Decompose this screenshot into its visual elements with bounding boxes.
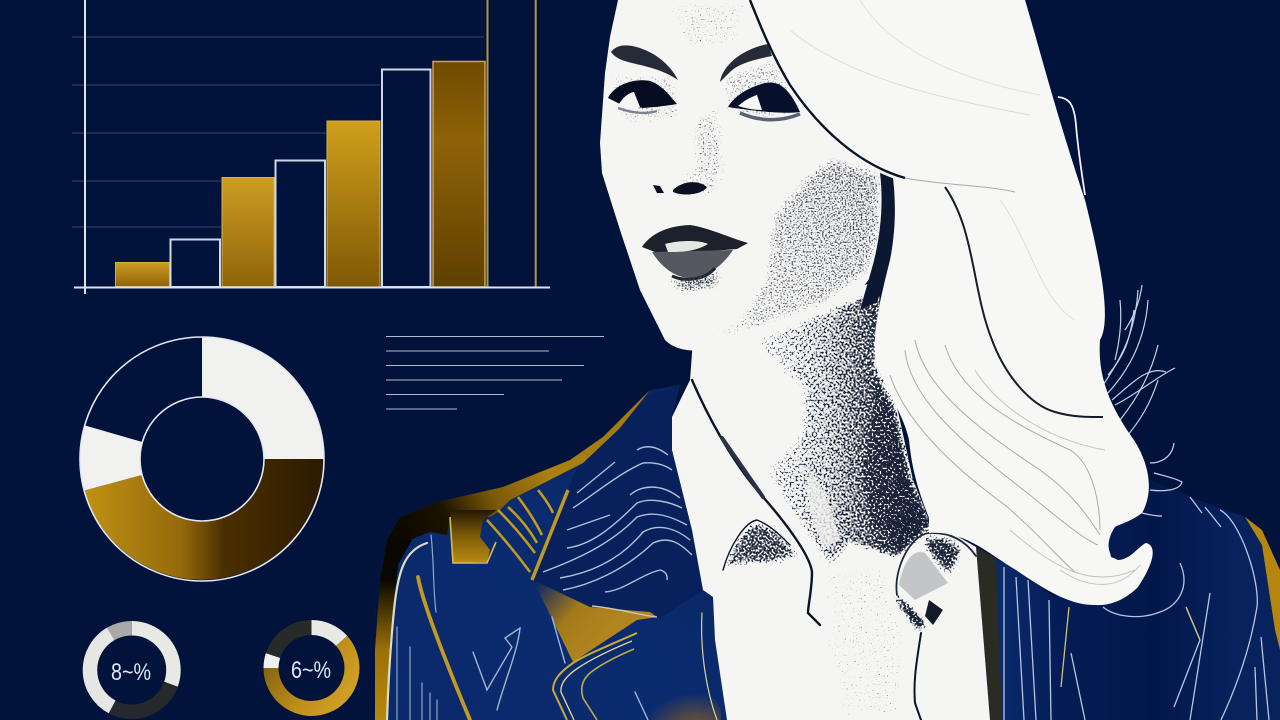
shadow beside face xyxy=(860,173,897,310)
sleeve gold edge xyxy=(375,540,412,720)
forehead stipple xyxy=(660,0,750,55)
neck highlight xyxy=(808,477,840,548)
donut segment: small white xyxy=(80,425,142,490)
gauge ring xyxy=(312,628,342,641)
lips xyxy=(642,225,748,279)
right eye surround stipple xyxy=(720,55,805,124)
text block: placeholder lines xyxy=(386,336,604,409)
bar 1 gold xyxy=(116,262,170,286)
jacket dark edge xyxy=(976,547,1002,720)
collar grey patch xyxy=(899,552,948,600)
gold lapel stripes xyxy=(450,490,568,580)
jacket lines xyxy=(1004,497,1269,720)
chart axes xyxy=(74,0,550,294)
neck shadow core xyxy=(858,285,931,548)
gauge: left xyxy=(90,628,173,712)
left eye surround stipple xyxy=(606,72,684,126)
jacket: left side xyxy=(375,385,727,720)
collar ink lines xyxy=(692,380,976,720)
face xyxy=(600,0,897,351)
lapel panel xyxy=(533,385,703,618)
bar chart xyxy=(72,0,550,294)
nose xyxy=(653,182,707,194)
shirt and neck xyxy=(672,280,990,720)
jacket: right side xyxy=(976,480,1280,720)
bar 6 outline xyxy=(382,70,430,287)
gauge label: 8~% xyxy=(111,659,151,686)
gauge white tab xyxy=(271,656,273,668)
bar 4 outline xyxy=(276,160,325,287)
neck stipple shading xyxy=(750,285,935,570)
hair front lock edge xyxy=(750,0,905,178)
hair xyxy=(750,0,1153,605)
gauge dark arc xyxy=(273,628,312,656)
bar 2 outline xyxy=(170,240,220,287)
collar button xyxy=(925,600,943,625)
donut segment: gold xyxy=(84,459,324,580)
copper accent xyxy=(649,687,721,720)
donut chart xyxy=(80,337,324,581)
bar 3 gold xyxy=(222,178,274,286)
shoulder gold band xyxy=(383,390,650,590)
sleeve lines xyxy=(387,535,717,720)
gauge gold arc xyxy=(271,641,352,708)
left eye xyxy=(608,80,677,113)
chest stipple xyxy=(820,560,910,720)
hair curl shadow xyxy=(1110,528,1138,559)
collar shadow left xyxy=(723,520,802,570)
gauge label: 6~% xyxy=(291,657,331,684)
collar gold piece xyxy=(450,510,497,563)
cheek stipple xyxy=(690,155,882,346)
collar shadow right xyxy=(920,535,964,578)
brow and nose stipple xyxy=(668,100,728,202)
hair strands xyxy=(790,0,1140,584)
hair wisps xyxy=(1058,97,1182,516)
chin shadow xyxy=(663,268,725,295)
right eye xyxy=(728,82,800,120)
donut segment: large white xyxy=(202,337,324,459)
hair inner line xyxy=(945,187,1103,417)
gauge: right xyxy=(271,628,352,708)
gold triangle panel xyxy=(533,580,657,662)
left eyebrow xyxy=(611,45,678,80)
pale lapel waves xyxy=(543,447,692,617)
gold vertical rules xyxy=(488,0,536,287)
gold inner folds xyxy=(553,633,637,720)
right eyebrow xyxy=(720,44,772,82)
bar 7 dark gold xyxy=(433,62,485,287)
gold shoulder edge xyxy=(1245,517,1280,650)
bar 5 gold xyxy=(327,121,380,287)
collar stipple lower xyxy=(889,587,928,635)
